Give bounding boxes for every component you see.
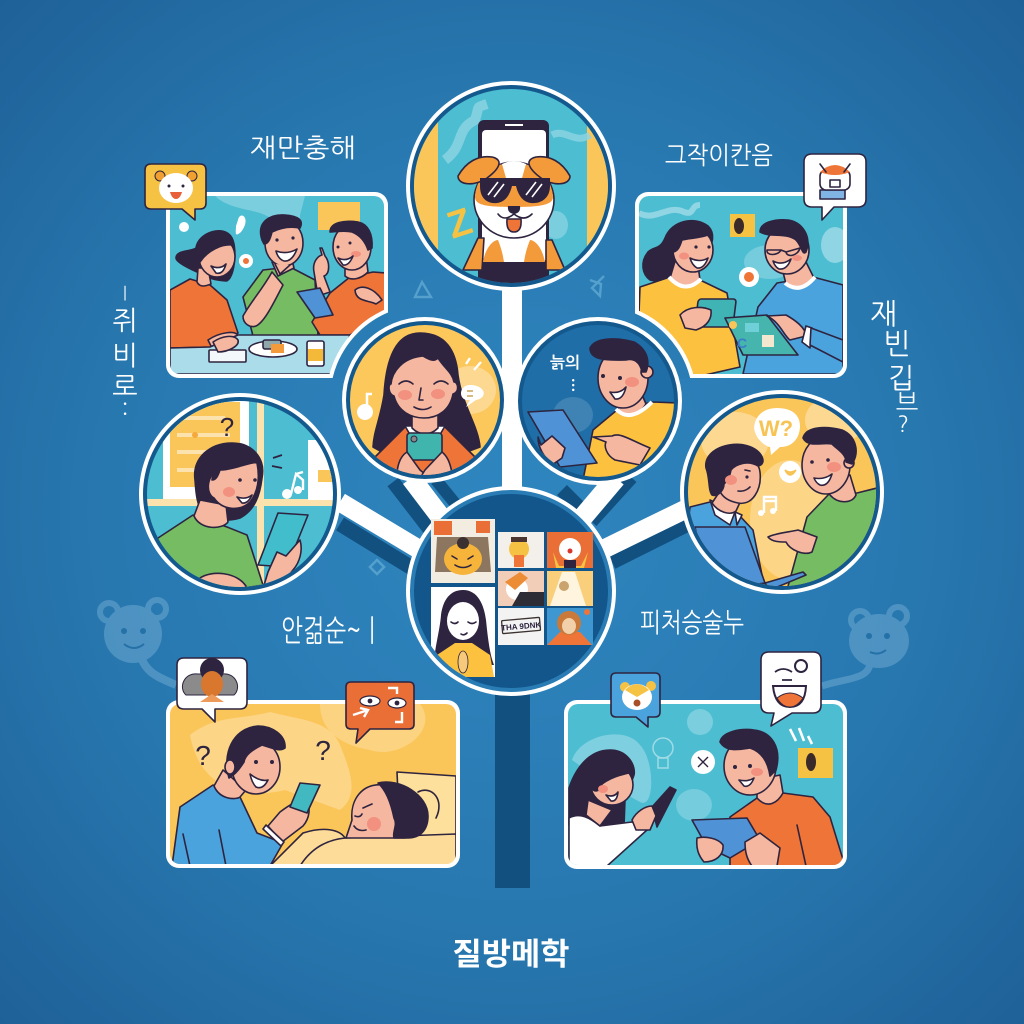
circle: center sticker collage: [406, 486, 616, 696]
decorative ghost bear right: [822, 607, 909, 686]
icon: white laughing face bubble: [761, 652, 821, 726]
label: left vertical: 쥐: [112, 307, 138, 334]
pillow and sleeper: [270, 772, 456, 866]
blue tablet: [297, 288, 333, 318]
tablets: [680, 299, 843, 362]
label: right vertical: 브: [896, 391, 918, 415]
woman in white: [569, 750, 676, 866]
question marks: ?: [195, 740, 211, 771]
man in orange: [692, 730, 845, 866]
panel cutout top right: [635, 310, 694, 378]
decorative small shapes: [370, 276, 604, 574]
laptop and pointing hand: [695, 527, 817, 590]
label: right vertical: 깁: [888, 364, 914, 393]
icon: orange sticker bubble with eyes: [346, 682, 414, 743]
panel: bottom right woman and man with tablets: [564, 700, 847, 869]
panel: bottom left man with phone and sleeper: ?: [315, 735, 331, 766]
tree trunk and branches: [340, 280, 688, 888]
right person: [787, 426, 876, 586]
tile: stamp text: THA 9DNK: [501, 620, 542, 633]
circle: top dog with sunglasses and phone: [406, 81, 616, 300]
tile: monkey: [547, 608, 593, 645]
title: 질방메학: [452, 937, 570, 972]
label: left vertical: :: [122, 399, 128, 421]
dog head: [474, 162, 554, 238]
label: right vertical: 재: [870, 300, 898, 329]
circle: mid right man with tablet: ...: [570, 378, 585, 392]
label: left vertical: 로: [112, 373, 138, 400]
panel: top right couple with tablets: [635, 192, 849, 378]
label: lower left: 안걺순~ㅣ: [281, 616, 383, 646]
icon: dog sticker bubble: [145, 164, 206, 220]
circle: right two people at laptop: [680, 390, 885, 595]
man in green: [243, 215, 318, 336]
label: right vertical: ?: [897, 414, 909, 436]
left person: [689, 444, 765, 584]
man in orange: [312, 221, 386, 335]
circle: left woman with tablet: [139, 393, 341, 596]
label: right vertical: 빈: [883, 330, 911, 359]
label: left vertical: [112, 285, 138, 421]
label: top right: 그작이칸음: [665, 143, 773, 168]
label: top left: 재만충해: [250, 135, 356, 161]
table with plate and cup: [170, 335, 350, 374]
label: right vertical: [870, 300, 918, 436]
icon: blue dog sticker bubble: [611, 673, 660, 727]
circle: mid right man with tablet: [514, 317, 685, 485]
small label in circle: 늙의: [550, 354, 580, 371]
tile: stamp text: [498, 608, 544, 645]
tile: dog: [498, 571, 544, 606]
panel: bottom left man with phone and sleeper: [166, 700, 460, 868]
tile: yellow character: [498, 532, 544, 568]
tablets: C: [737, 335, 747, 351]
tile: bear: [431, 519, 495, 583]
panel: top left friends at table: [166, 192, 388, 378]
label: left vertical: ㅣ: [117, 285, 133, 302]
man in blue: [172, 726, 320, 866]
man in blue with glasses: [743, 220, 843, 374]
circle: mid left woman with phone: [342, 317, 508, 490]
woman in yellow: [639, 221, 740, 378]
tile: white light: [547, 571, 593, 606]
icon: white sticker bubble with face: [177, 658, 247, 722]
label: left vertical: 비: [112, 342, 138, 369]
z letter: Z: [442, 200, 477, 248]
decorative ghost bear left: [100, 600, 176, 685]
speech bubbles and note: [754, 408, 801, 516]
circle: left woman with tablet: ?: [220, 412, 234, 442]
icon: robot sticker bubble: [804, 154, 866, 220]
dog body: [463, 238, 565, 270]
speech bubbles and note: W?: [759, 416, 793, 441]
woman in orange: [170, 231, 238, 349]
phone: [478, 120, 549, 300]
label: lower right: 피처승술누: [640, 609, 744, 636]
tile: woman with closed eyes: [431, 587, 495, 677]
panel cutout top left: [330, 310, 388, 378]
tile: clown: [547, 532, 593, 568]
